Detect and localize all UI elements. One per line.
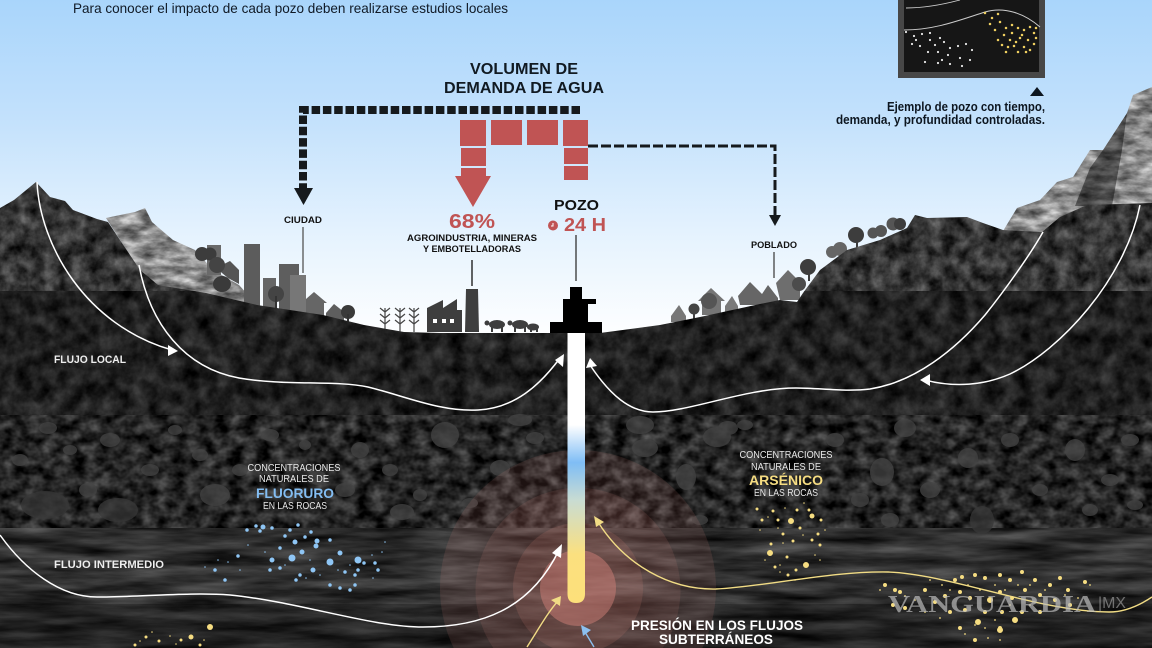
crops (380, 308, 419, 332)
label: poblado: POBLADO (751, 240, 797, 251)
flow: intermedio (0, 535, 559, 627)
trees on right hillside (800, 218, 906, 281)
watermark: VANGUARDIA (888, 592, 1097, 618)
inset: example well (898, 0, 1045, 78)
sky background (0, 0, 1152, 340)
label: agroindustria (407, 233, 537, 255)
label: arsenico: ARSÉNICO (749, 472, 823, 488)
label: arsenico: CONCENTRACIONES (740, 450, 833, 461)
heading: volumen de demanda de agua (444, 61, 604, 97)
arrow: dashed thin arrow to poblado (588, 146, 781, 226)
label: presion en los flujos: SUBTERRÁNEOS (659, 631, 773, 647)
stratum: sediment (0, 528, 1152, 648)
stratum: bottom shadow (0, 604, 1152, 648)
label: arsenico: NATURALES DE (751, 462, 821, 473)
label: ciudad: CIUDAD (284, 215, 322, 226)
rocks (12, 414, 1143, 534)
pump silhouette (550, 287, 602, 333)
label: arsenico (740, 450, 833, 499)
label: 24 H with clock icon (548, 215, 606, 235)
city skyline (195, 244, 355, 324)
label: 68 percent: 68% (449, 211, 495, 233)
label: 24 H with clock icon: 24 H (564, 215, 606, 235)
watermark: |MX (1098, 595, 1126, 612)
flow: local left peak (37, 182, 172, 350)
watermark (888, 592, 1126, 618)
flow: local right to well (590, 232, 1043, 412)
label: presion en los flujos: PRESIÓN EN LOS FLUJOS (631, 616, 803, 633)
flow: far right (925, 205, 1140, 385)
icon: inset pointer triangle (1030, 87, 1044, 96)
label: pozo: POZO (554, 197, 599, 214)
arsenic dots (757, 503, 825, 580)
stratum: upper soil (0, 170, 1152, 292)
village houses (671, 270, 806, 322)
label: fluoruro (248, 463, 341, 512)
yellow flow arrow (594, 516, 1152, 612)
stratum: dark soil (0, 291, 1152, 416)
white flow arrows (0, 182, 1140, 627)
blue arrow from below (581, 625, 594, 647)
leader lines (303, 227, 774, 286)
label: presion en los flujos (631, 616, 803, 647)
arrow: dashed thick arrow to ciudad (294, 110, 580, 205)
label: fluoruro: EN LAS ROCAS (263, 501, 327, 512)
large yellow dots cluster (880, 572, 1090, 640)
right stone mountain (1004, 87, 1152, 232)
label: arsenico: EN LAS ROCAS (754, 488, 818, 499)
bottom-left yellow dots (135, 627, 210, 645)
label: fluoruro: NATURALES DE (259, 474, 329, 485)
livestock (484, 320, 539, 332)
well shaft (568, 333, 585, 603)
label: flujo local: FLUJO LOCAL (54, 354, 126, 366)
flow: local left to well (139, 265, 560, 410)
subtitle text: Para conocer el impacto de cada pozo deben realizarse estudios locales (73, 0, 508, 16)
red demand blocks and arrow (455, 120, 588, 207)
label: agroindustria: AGROINDUSTRIA, MINERAS (407, 233, 537, 244)
inset caption: demanda, y profundidad controladas. (836, 113, 1045, 127)
inset caption (836, 100, 1045, 127)
ground strata (0, 170, 1152, 648)
heading: volumen de demanda de agua: DEMANDA DE AGUA (444, 80, 604, 97)
factory (427, 289, 479, 332)
yellow arrow from below (527, 596, 561, 647)
fluoride dots (205, 525, 385, 590)
left stone mountain (106, 208, 244, 302)
label: flujo intermedio: FLUJO INTERMEDIO (54, 559, 164, 571)
inset caption: Ejemplo de pozo con tiempo, (887, 100, 1045, 114)
white arrowheads (168, 345, 930, 558)
label: fluoruro: FLUORURO (256, 485, 334, 501)
pressure circles (440, 450, 716, 648)
label: agroindustria: Y EMBOTELLADORAS (423, 244, 521, 255)
heading: volumen de demanda de agua: VOLUMEN DE (470, 61, 578, 78)
stratum: rock layer (0, 415, 1152, 529)
label: fluoruro: CONCENTRACIONES (248, 463, 341, 474)
